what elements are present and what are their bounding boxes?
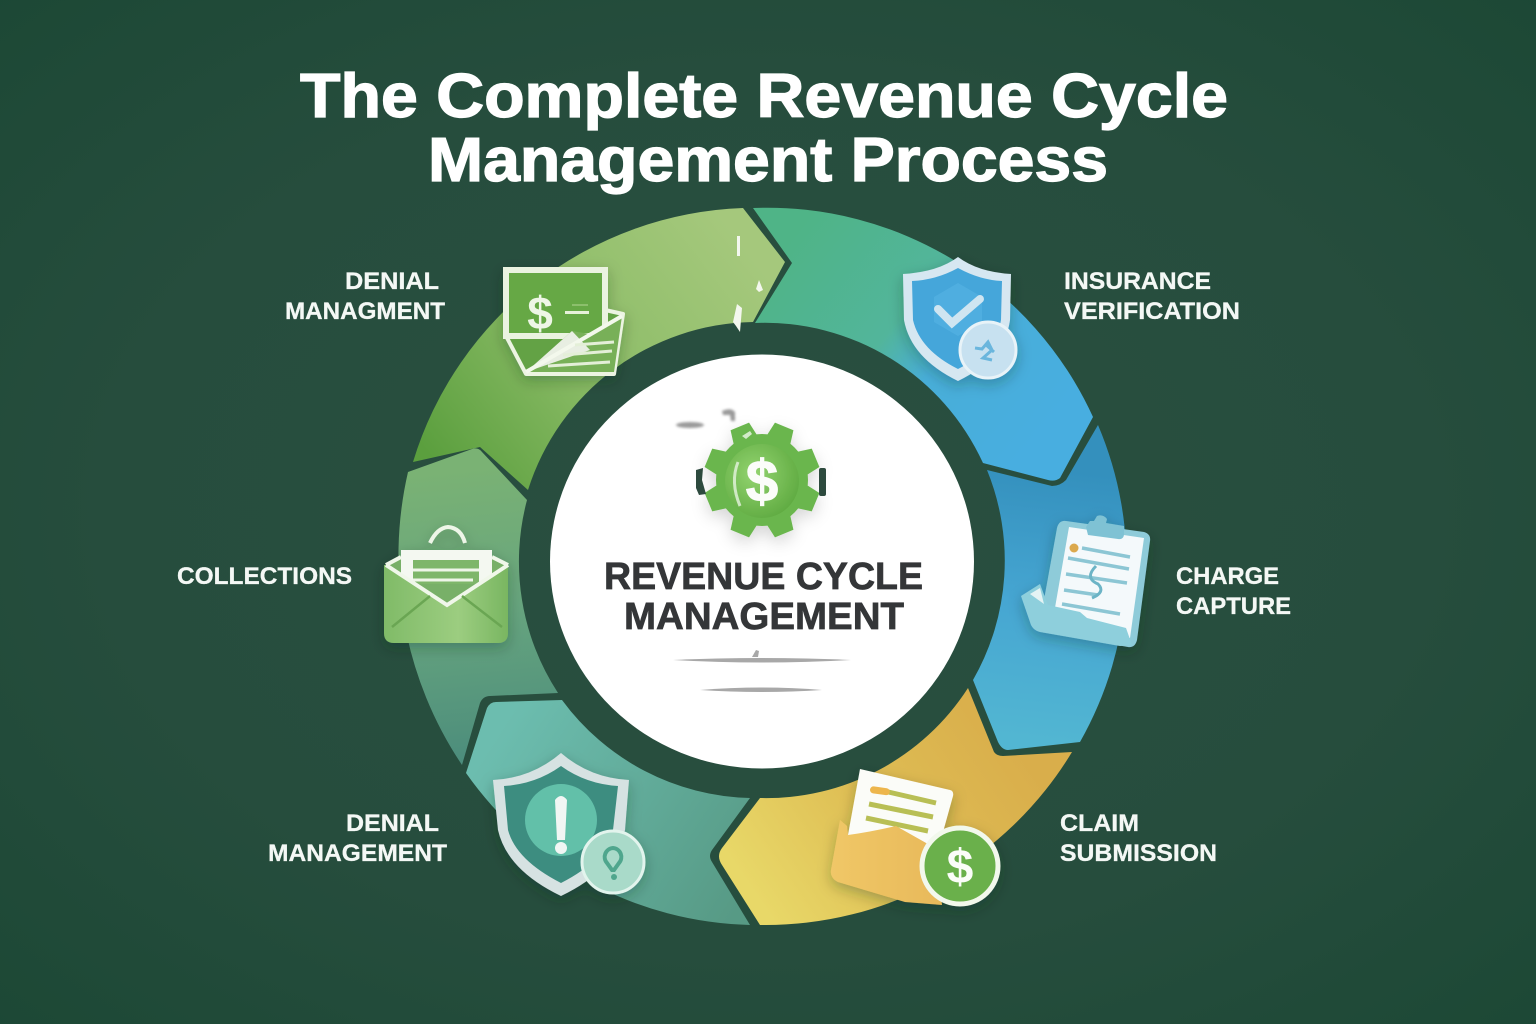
icon: teal shield with exclamation (493, 753, 644, 896)
icon: dollar coin (922, 828, 998, 904)
center divider lines (673, 650, 851, 692)
icon: gear with dollar (703, 421, 821, 539)
label: denial management bottom-left: MANAGEMENT (268, 840, 447, 867)
label: charge capture: CAPTURE (1176, 593, 1291, 620)
label: insurance verification: INSURANCE (1064, 268, 1211, 295)
segment: denial management top-left (413, 208, 785, 490)
icon: clipboard and folder (1021, 515, 1150, 647)
segment: claim submission (719, 688, 1072, 925)
segment: charge capture (973, 425, 1127, 750)
artifacts on ring (733, 236, 763, 332)
label: insurance verification: VERIFICATION (1064, 298, 1240, 325)
label: charge capture: CHARGE (1176, 563, 1279, 590)
label: claim submission: SUBMISSION (1060, 840, 1217, 867)
center label: REVENUE CYCLE (604, 556, 923, 598)
center circle (550, 354, 974, 768)
label: claim submission (1060, 810, 1217, 867)
center label: MANAGEMENT (624, 596, 904, 638)
icon: invoice document (505, 270, 623, 374)
title (300, 62, 1228, 195)
icon: dollar coin: $ (947, 841, 974, 894)
label: insurance verification (1064, 268, 1240, 325)
icon: gear side brackets (696, 468, 826, 496)
label: denial management top-left: MANAGMENT (285, 298, 445, 325)
segment: insurance verification (753, 208, 1093, 481)
segment: denial management bottom-left (466, 700, 750, 925)
center label (604, 556, 923, 638)
segment: collections (398, 448, 558, 765)
title: The Complete Revenue Cycle (300, 62, 1228, 131)
icon: blue shield with check (903, 257, 1016, 381)
center decoration smudges (676, 409, 735, 428)
title: Management Process (428, 126, 1108, 195)
icon: teal shield badge (582, 831, 644, 893)
icon: envelope with letter (384, 527, 508, 643)
icon: gear with dollar: $ (746, 449, 778, 514)
label: claim submission: CLAIM (1060, 810, 1139, 837)
icon: claim envelope and dollar (831, 769, 998, 905)
label: denial management top-left: DENIAL (345, 268, 439, 295)
icon: blue shield badge (960, 322, 1016, 378)
cycle diagram (398, 208, 1127, 925)
label: collections: COLLECTIONS (177, 563, 352, 590)
label: denial management bottom-left (268, 810, 447, 867)
label: charge capture (1176, 563, 1291, 620)
label: denial management bottom-left: DENIAL (346, 810, 439, 837)
icon: invoice document: $ (527, 287, 553, 339)
label: denial management top-left (285, 268, 445, 325)
